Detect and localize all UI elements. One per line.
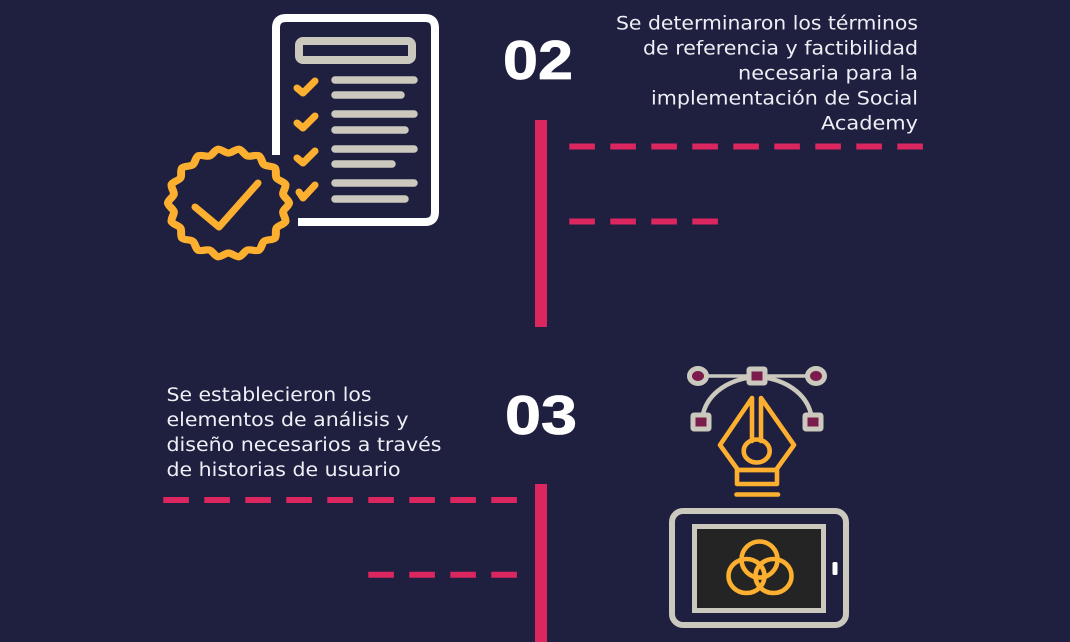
text block: step 02 <box>616 14 918 134</box>
tablet body <box>672 511 846 625</box>
text block: step 02: Academy <box>821 114 918 134</box>
bezier handles and curve <box>698 376 816 414</box>
document text lines <box>335 80 414 199</box>
icon: checklist document with badge <box>165 18 435 260</box>
dashed line: step 02 upper <box>569 144 923 150</box>
text block: step 03 <box>166 385 442 481</box>
right handle node <box>808 368 824 384</box>
right anchor node <box>805 415 821 429</box>
tablet button <box>832 562 838 575</box>
document outline <box>276 18 435 222</box>
text block: step 03: Se establecieron los <box>166 385 372 406</box>
dashed line: step 03 lower <box>368 572 517 578</box>
text block: step 03: de historias de usuario <box>166 460 400 481</box>
text block: step 03: diseño necesarios a través <box>166 435 442 456</box>
document header box <box>299 41 412 60</box>
overlapping circles <box>728 542 792 593</box>
icon: bezier pen tool <box>690 368 824 494</box>
text block: step 03: elementos de análisis y <box>166 410 409 431</box>
list check marks <box>297 81 315 198</box>
tablet screen <box>694 526 824 610</box>
centre anchor node <box>749 369 765 383</box>
pen nib <box>720 398 794 494</box>
left anchor node <box>693 415 709 429</box>
text block: step 02: necesaria para la <box>738 64 918 84</box>
text block: step 02: Se determinaron los términos <box>616 14 918 34</box>
text block: step 02: de referencia y factibilidad <box>643 38 918 60</box>
icon: tablet with overlapping circles <box>672 511 846 625</box>
timeline bar: step 02 <box>535 120 547 327</box>
number 03: 03 <box>505 384 577 446</box>
seal badge <box>165 146 292 260</box>
dashed line: step 03 upper <box>163 497 517 503</box>
badge check mark <box>195 183 258 227</box>
dashed line: step 02 lower <box>569 218 718 224</box>
number 02: 02 <box>503 29 573 91</box>
left handle node <box>690 368 706 384</box>
timeline bar: step 03 <box>535 484 547 642</box>
text block: step 02: implementación de Social <box>651 88 918 110</box>
